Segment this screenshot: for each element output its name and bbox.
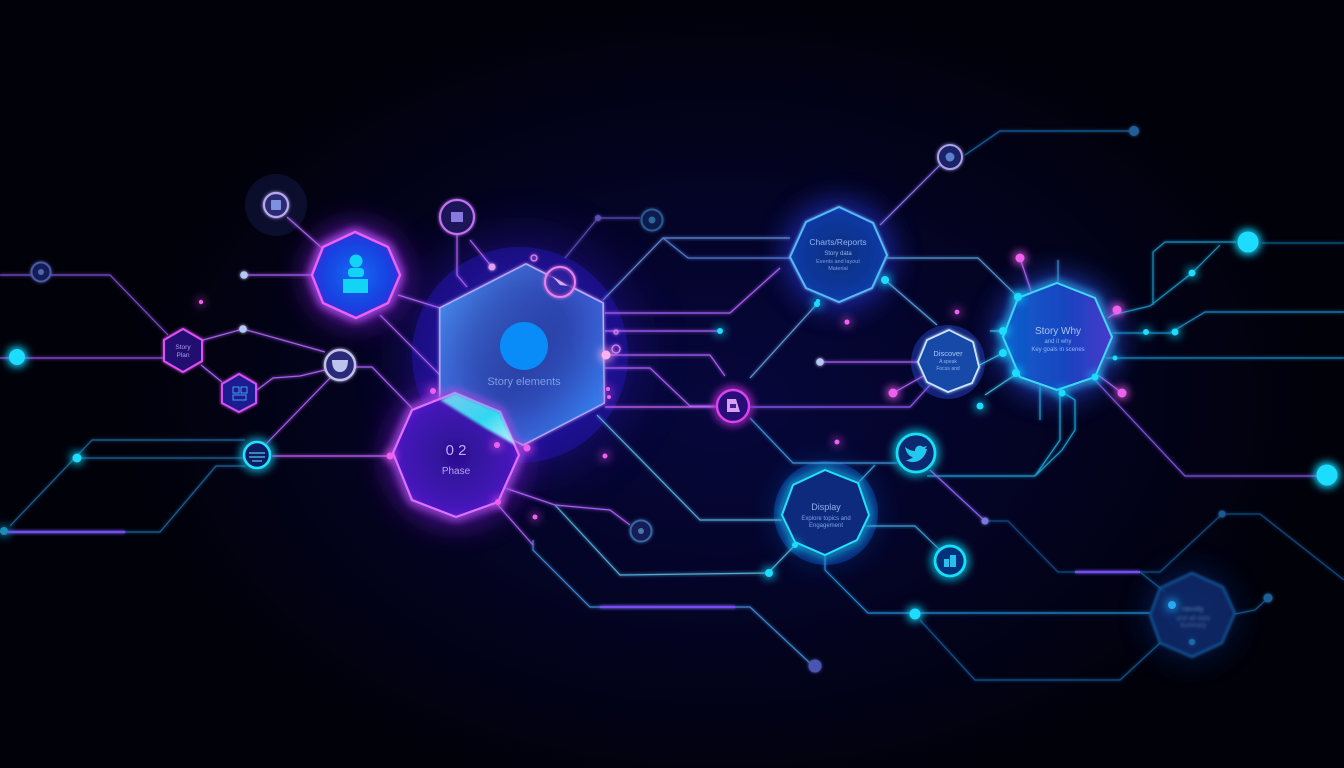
nodes: cyan xyxy=(0,232,1338,620)
panel: discover octagon xyxy=(918,330,979,392)
panel: display octagon: Engagement xyxy=(809,523,843,529)
icon: ring pin top xyxy=(440,200,474,234)
connector lines: violet xyxy=(0,165,1325,545)
small hexagon: text node xyxy=(164,329,202,372)
phase label: Phase xyxy=(442,466,471,477)
panel: story why octagon: Key goals in scenes xyxy=(1031,347,1085,353)
icon: ring top left xyxy=(264,193,288,217)
panel: chart reports octagon: Charts/Reports xyxy=(809,237,867,247)
panel: chart reports octagon: Events and layout xyxy=(816,259,860,265)
icon: hub blue disc xyxy=(500,322,548,370)
panel: story elements hub xyxy=(440,264,604,445)
panel: faded octagon: Summary xyxy=(1180,623,1206,629)
nodes: pale xyxy=(239,126,1273,672)
icon: bars ring xyxy=(935,546,965,576)
panel: faded octagon: Identify xyxy=(1183,606,1204,613)
highlighted line segments xyxy=(5,532,1140,607)
panel: faded octagon xyxy=(1150,573,1235,657)
small hexagon: grid icon xyxy=(222,374,256,412)
panel: chart reports octagon: Story data xyxy=(824,251,852,257)
icon: ring top right xyxy=(938,145,962,169)
glow halos xyxy=(245,174,1237,661)
panel: person octagon xyxy=(312,232,400,318)
icon: cyan stack ring xyxy=(244,442,270,468)
panel: discover octagon: Discover xyxy=(933,349,963,358)
icon: ring document center xyxy=(717,390,749,422)
icon: small ring bottom center xyxy=(630,520,652,542)
panel: display octagon xyxy=(782,470,869,555)
panel: story why octagon: Story Why xyxy=(1035,326,1081,337)
hub label: Story elements xyxy=(487,376,561,388)
icon: ring dim top center xyxy=(642,210,662,230)
small ring markers xyxy=(531,255,620,353)
phase number: 0 2 xyxy=(446,442,466,459)
panel: discover octagon: Focus and xyxy=(936,366,960,372)
panel: display octagon: Display xyxy=(811,502,841,512)
panel: chart reports octagon: Material xyxy=(828,266,848,272)
panel: story why octagon xyxy=(1003,283,1112,390)
small hexagon: text node: Story xyxy=(175,344,191,351)
panel: phase octagon xyxy=(393,393,519,517)
panel: discover octagon: A speak xyxy=(939,359,957,365)
panel: display octagon: Explore topics and xyxy=(801,516,851,522)
nodes: magenta xyxy=(199,254,1127,520)
icon: shield ring xyxy=(325,350,355,380)
connector lines: cool blue xyxy=(0,131,1344,680)
icon: person xyxy=(343,254,368,293)
overlap lens highlight xyxy=(440,393,515,445)
panel: faded octagon: and all data xyxy=(1176,615,1210,622)
panel: story why octagon: and it why xyxy=(1044,339,1072,345)
small hexagon: text node: Plan xyxy=(176,352,190,359)
icon: ring left dim xyxy=(32,262,50,282)
panel: chart reports octagon xyxy=(790,207,887,302)
icon: twitter ring xyxy=(897,434,935,472)
icon: ring on hub edge xyxy=(545,267,575,297)
